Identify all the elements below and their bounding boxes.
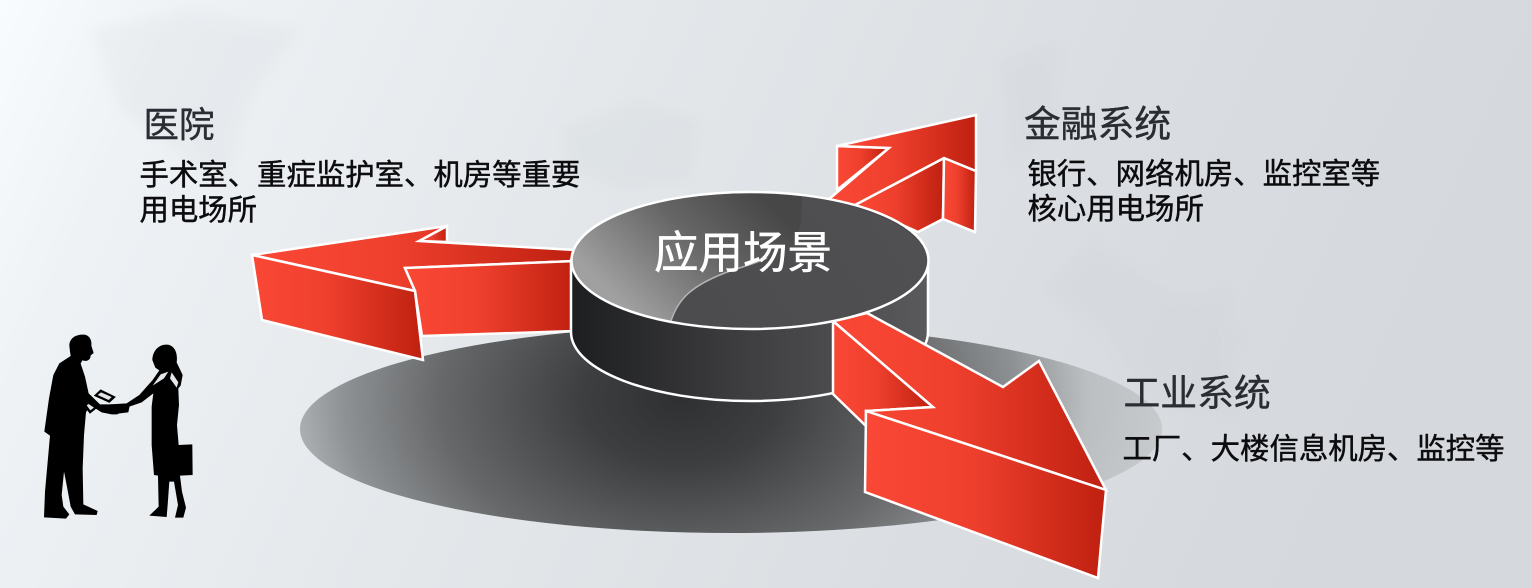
heading: hospital: 医院 bbox=[144, 105, 215, 145]
arrow lower shaft bbox=[405, 261, 575, 336]
text: hospital detail: 用电场所 bbox=[140, 194, 257, 227]
arrow fold: left bbox=[837, 146, 889, 190]
arrow top face bbox=[833, 313, 1106, 490]
man bbox=[44, 335, 130, 519]
center title: 应用场景 bbox=[654, 229, 832, 278]
disc swoosh bbox=[671, 196, 928, 329]
heading: industry: 工业系统 bbox=[1124, 373, 1271, 414]
arrow right fold bbox=[943, 158, 976, 232]
arrow front face bbox=[252, 255, 423, 360]
icon: handshake silhouette bbox=[44, 335, 193, 519]
woman bbox=[110, 345, 193, 518]
arrow notch fold bbox=[419, 226, 447, 242]
arrow front face bbox=[865, 411, 1106, 578]
swoosh highlight bbox=[671, 258, 767, 321]
disc top bbox=[572, 192, 928, 329]
arrow lower fold bbox=[855, 158, 944, 232]
world map watermark bbox=[90, 10, 1250, 420]
text: industry detail: 工厂、大楼信息机房、监控等 bbox=[1122, 433, 1505, 466]
text: finance detail: 银行、网络机房、监控室等 bbox=[1028, 158, 1380, 191]
collar highlight bbox=[153, 372, 178, 388]
text: finance detail: 核心用电场所 bbox=[1028, 193, 1204, 226]
text: hospital detail: 手术室、重症监护室、机房等重要 bbox=[140, 159, 580, 192]
cylinder wall bbox=[571, 260, 928, 401]
heading: finance: 金融系统 bbox=[1024, 104, 1171, 145]
arrow top face bbox=[828, 115, 976, 205]
arrow fold: left bbox=[833, 321, 933, 426]
arrow: hospital (left) bbox=[252, 226, 575, 360]
arrow: industrial (bottom right) bbox=[833, 313, 1106, 578]
base shadow ellipse bbox=[300, 325, 1162, 533]
tablet bbox=[84, 390, 115, 413]
arrow top face bbox=[252, 226, 575, 291]
arrow: finance (top right) bbox=[828, 115, 976, 232]
